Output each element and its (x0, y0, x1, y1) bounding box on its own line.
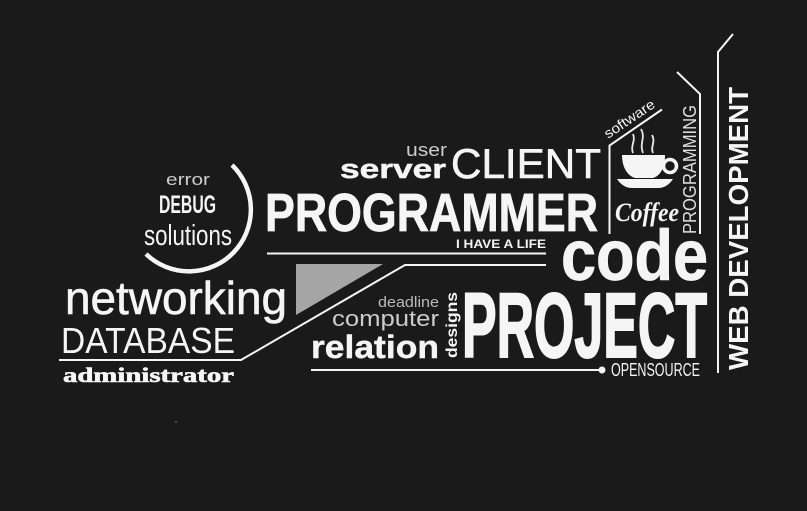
OPENSOURCE label: OPENSOURCE (611, 360, 700, 380)
error label: error (166, 170, 210, 189)
administrator label: administrator (63, 363, 234, 387)
group: client heading (340, 140, 601, 187)
Coffee label: Coffee (615, 198, 679, 227)
computer label: computer (332, 306, 439, 331)
small speck (175, 421, 177, 423)
icon: steam (632, 129, 653, 153)
PROGRAMMER heading: PROGRAMMER (265, 183, 598, 243)
PROGRAMMING label: PROGRAMMING (680, 105, 700, 234)
grey triangle (296, 264, 383, 315)
group: coffee (601, 96, 679, 234)
web development line (718, 34, 733, 373)
opensource line (311, 366, 606, 374)
server label: server (340, 154, 447, 184)
arc (146, 165, 251, 271)
software label: software (601, 96, 658, 141)
solutions label: solutions (144, 220, 232, 252)
divider line (267, 252, 546, 254)
group: relation words (311, 292, 461, 365)
group: networking (61, 272, 287, 387)
software line (610, 110, 662, 234)
group: programming (677, 72, 700, 234)
DATABASE label: DATABASE (61, 320, 235, 361)
I HAVE A LIFE label: I HAVE A LIFE (456, 237, 546, 251)
designs label: designs (444, 292, 461, 358)
DEBUG label: DEBUG (159, 191, 216, 219)
WEB DEVELOPMENT label: WEB DEVELOPMENT (723, 87, 754, 370)
relation label: relation (311, 329, 439, 365)
icon: coffee cup (617, 155, 676, 188)
group: debug circle (144, 165, 251, 271)
programming line (677, 72, 700, 234)
code word: code (561, 217, 708, 296)
user label: user (406, 140, 447, 160)
deadline label: deadline (378, 294, 439, 311)
networking label: networking (65, 272, 287, 324)
CLIENT label: CLIENT (451, 140, 601, 187)
angled divider line (59, 265, 546, 360)
group: web development (718, 34, 754, 373)
